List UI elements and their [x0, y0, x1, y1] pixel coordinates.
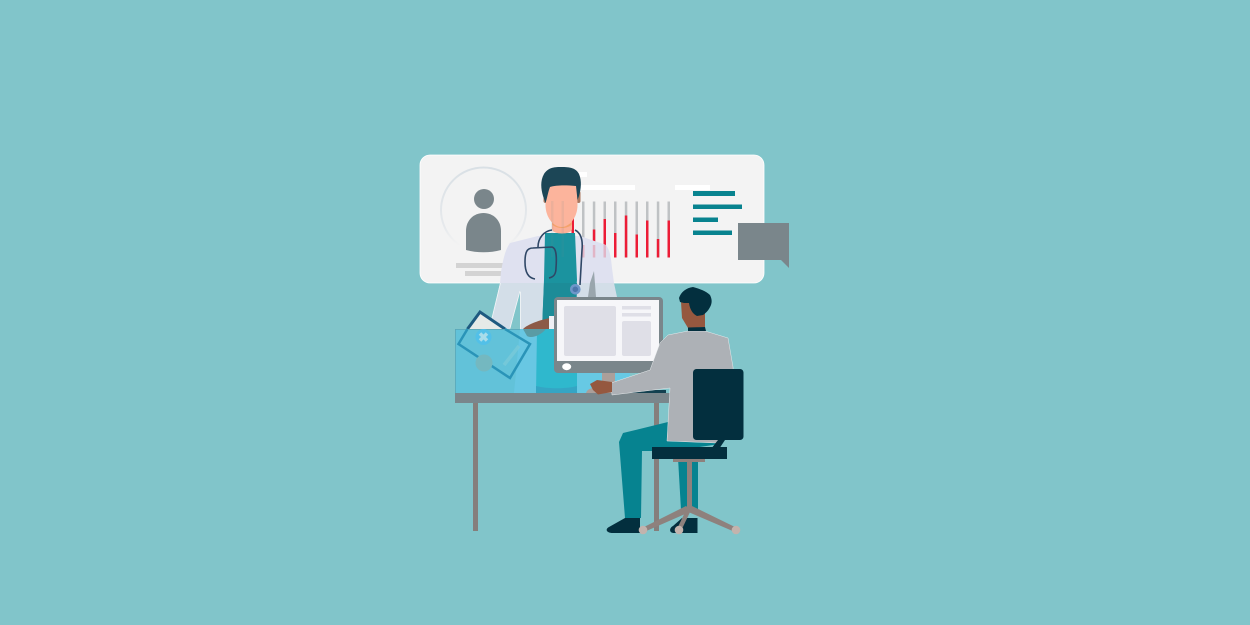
doctor figure	[491, 167, 626, 330]
patient hair	[679, 287, 712, 316]
patient front leg	[619, 422, 720, 518]
doctor hair	[541, 167, 581, 203]
patient collar	[688, 327, 706, 331]
bar chart: red levels	[572, 202, 670, 258]
patient front shoe	[607, 518, 640, 533]
desk right leg	[654, 403, 659, 531]
doctor scrubs	[542, 233, 577, 330]
doctor lower scrubs through glass	[536, 329, 577, 393]
computer monitor	[554, 297, 663, 393]
hand under glass	[523, 329, 546, 337]
chair casters	[639, 526, 740, 534]
icon: patient avatar	[441, 168, 526, 252]
clipboard	[458, 312, 530, 345]
patient shirt	[611, 331, 735, 443]
keyboard	[627, 390, 666, 393]
doctor neck	[552, 218, 572, 234]
office chair	[639, 369, 744, 534]
doctor hand	[523, 318, 551, 329]
chair back	[693, 369, 744, 440]
chair seat	[652, 447, 727, 459]
patient name lines	[456, 263, 512, 276]
doctor ears	[544, 191, 580, 203]
clipboard outline through glass	[458, 329, 530, 378]
icon: speech bubble	[738, 223, 789, 268]
patient hand	[590, 380, 612, 394]
doctor lab coat	[491, 235, 626, 330]
horizontal teal bars	[693, 191, 742, 235]
heading placeholder bars	[570, 172, 710, 190]
faint chart lines through the face	[551, 201, 564, 257]
patient back shoe	[670, 518, 698, 533]
stethoscope chest piece	[570, 284, 581, 295]
chair base legs	[642, 506, 737, 532]
patient neck and face	[681, 300, 705, 328]
doctor face	[546, 183, 578, 227]
desk left leg	[473, 403, 478, 531]
patient back leg	[678, 458, 698, 510]
glass desk partition	[455, 329, 630, 393]
doctor lower coat through glass	[514, 329, 537, 393]
chart seen through coat	[582, 245, 606, 258]
stethoscope	[525, 230, 582, 295]
chair post	[687, 459, 692, 510]
monitor stand	[586, 373, 615, 393]
desk	[455, 393, 671, 531]
seated patient	[590, 287, 735, 533]
panel: patient record screen	[420, 155, 764, 283]
chair bracket	[711, 440, 725, 449]
